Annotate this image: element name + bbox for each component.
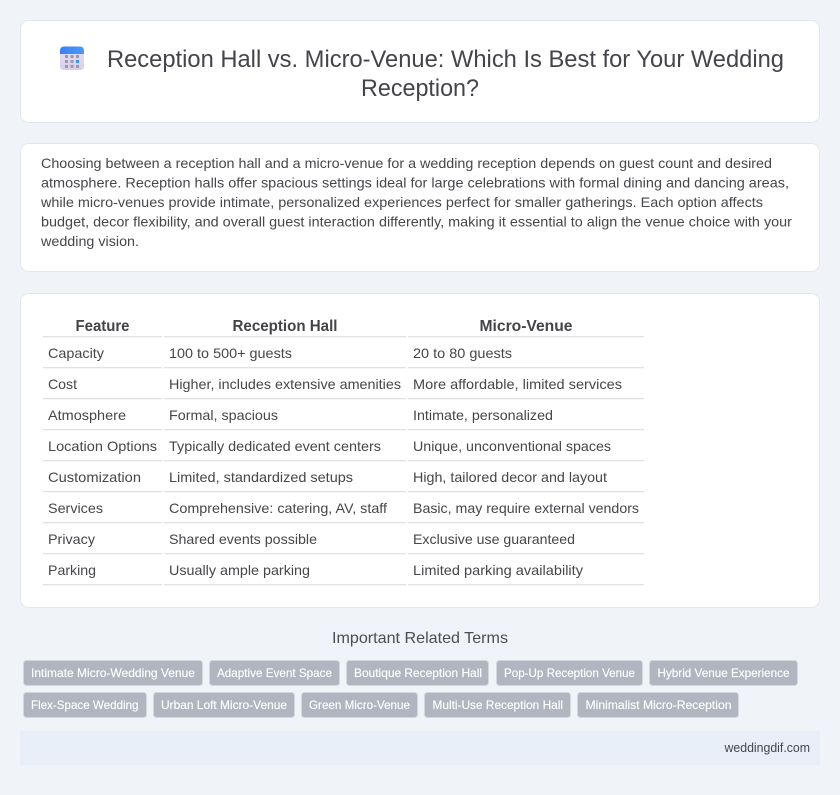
row: parking: Parking: [48, 562, 96, 578]
tag: Pop-Up Reception Venue: [504, 666, 635, 680]
text block: introduction paragraph: [40, 155, 792, 249]
tag: [302, 692, 418, 718]
row: location options: [48, 438, 611, 454]
row: capacity: Capacity: [48, 345, 104, 361]
row: privacy: Privacy: [48, 531, 95, 547]
title: [107, 46, 784, 102]
row: customization: Limited, standardized setups: [169, 469, 353, 485]
table header: Reception Hall: [232, 318, 338, 335]
tag: Flex-Space Wedding: [31, 698, 138, 712]
row: atmosphere: Atmosphere: [48, 407, 126, 423]
footer: weddingdif.com: [724, 740, 810, 755]
text block: introduction paragraph: atmosphere. Reception halls offer spacious settings ideal for large celebrations with formal dining and dancing areas,: [41, 174, 789, 190]
row: privacy: [48, 531, 575, 547]
text block: introduction paragraph: budget, decor flexibility, and overall guest interaction differently, making it essential to align the venue choice with your: [41, 214, 792, 230]
table header: Feature: [76, 318, 130, 335]
tag: Boutique Reception Hall: [354, 666, 482, 680]
tag: Urban Loft Micro-Venue: [161, 698, 287, 712]
table header: Micro-Venue: [480, 318, 573, 335]
text block: introduction paragraph: wedding vision.: [40, 233, 139, 249]
row: privacy: Exclusive use guaranteed: [413, 531, 575, 547]
title: Reception Hall vs. Micro-Venue: Which Is Best for Your Wedding: [107, 46, 784, 73]
text block: introduction paragraph: Choosing between a reception hall and a micro-venue for a wedding reception depends on guest count and desired: [41, 155, 772, 171]
tag: [24, 692, 146, 718]
row: location options: Location Options: [48, 438, 157, 454]
row: capacity: [48, 345, 512, 361]
tag: Adaptive Event Space: [217, 666, 332, 680]
row: cost: [48, 376, 622, 392]
row: parking: [48, 562, 583, 578]
row: services: Services: [48, 500, 103, 516]
tag: Multi-Use Reception Hall: [432, 698, 563, 712]
row: cost: More affordable, limited services: [413, 376, 622, 392]
tag: [154, 692, 294, 718]
row: cost: Higher, includes extensive amenities: [169, 376, 401, 392]
row: atmosphere: Intimate, personalized: [413, 407, 553, 423]
tags: related terms: [24, 660, 798, 718]
table header: [76, 318, 573, 335]
row: location options: Typically dedicated event centers: [169, 438, 381, 454]
tag: Minimalist Micro-Reception: [586, 698, 732, 712]
row: customization: High, tailored decor and layout: [413, 469, 607, 485]
row: services: Comprehensive: catering, AV, staff: [169, 500, 387, 516]
tag: [346, 660, 488, 686]
row: services: Basic, may require external vendors: [413, 500, 639, 516]
tag: Green Micro-Venue: [309, 698, 410, 712]
row: parking: Limited parking availability: [413, 562, 583, 578]
row: customization: [48, 469, 607, 485]
tag: Intimate Micro-Wedding Venue: [31, 666, 195, 680]
panel: introduction: [20, 144, 820, 272]
title: Reception?: [361, 75, 479, 102]
row: atmosphere: [48, 407, 553, 423]
tag: [496, 660, 642, 686]
row: capacity: 20 to 80 guests: [413, 345, 512, 361]
text block: introduction paragraph: while micro-venues provide intimate, personalized experiences perfect for smaller gatherings. Each option affects: [40, 194, 763, 210]
icon: calendar: [60, 46, 84, 70]
row: cost: Cost: [48, 376, 77, 392]
row: atmosphere: Formal, spacious: [169, 407, 278, 423]
row: parking: Usually ample parking: [169, 562, 310, 578]
footer: [20, 731, 820, 765]
tag: [210, 660, 340, 686]
row: capacity: 100 to 500+ guests: [169, 345, 292, 361]
row: customization: Customization: [48, 469, 141, 485]
row: services: [48, 500, 639, 516]
tag: [424, 692, 570, 718]
heading: important related terms: Important Related Terms: [332, 630, 508, 647]
tag: [24, 660, 202, 686]
tag: [650, 660, 798, 686]
panel: title card: [20, 20, 820, 122]
tag: Hybrid Venue Experience: [658, 666, 790, 680]
panel: comparison table: [20, 294, 820, 608]
row: privacy: Shared events possible: [169, 531, 317, 547]
tag: [578, 692, 738, 718]
row: location options: Unique, unconventional spaces: [413, 438, 611, 454]
